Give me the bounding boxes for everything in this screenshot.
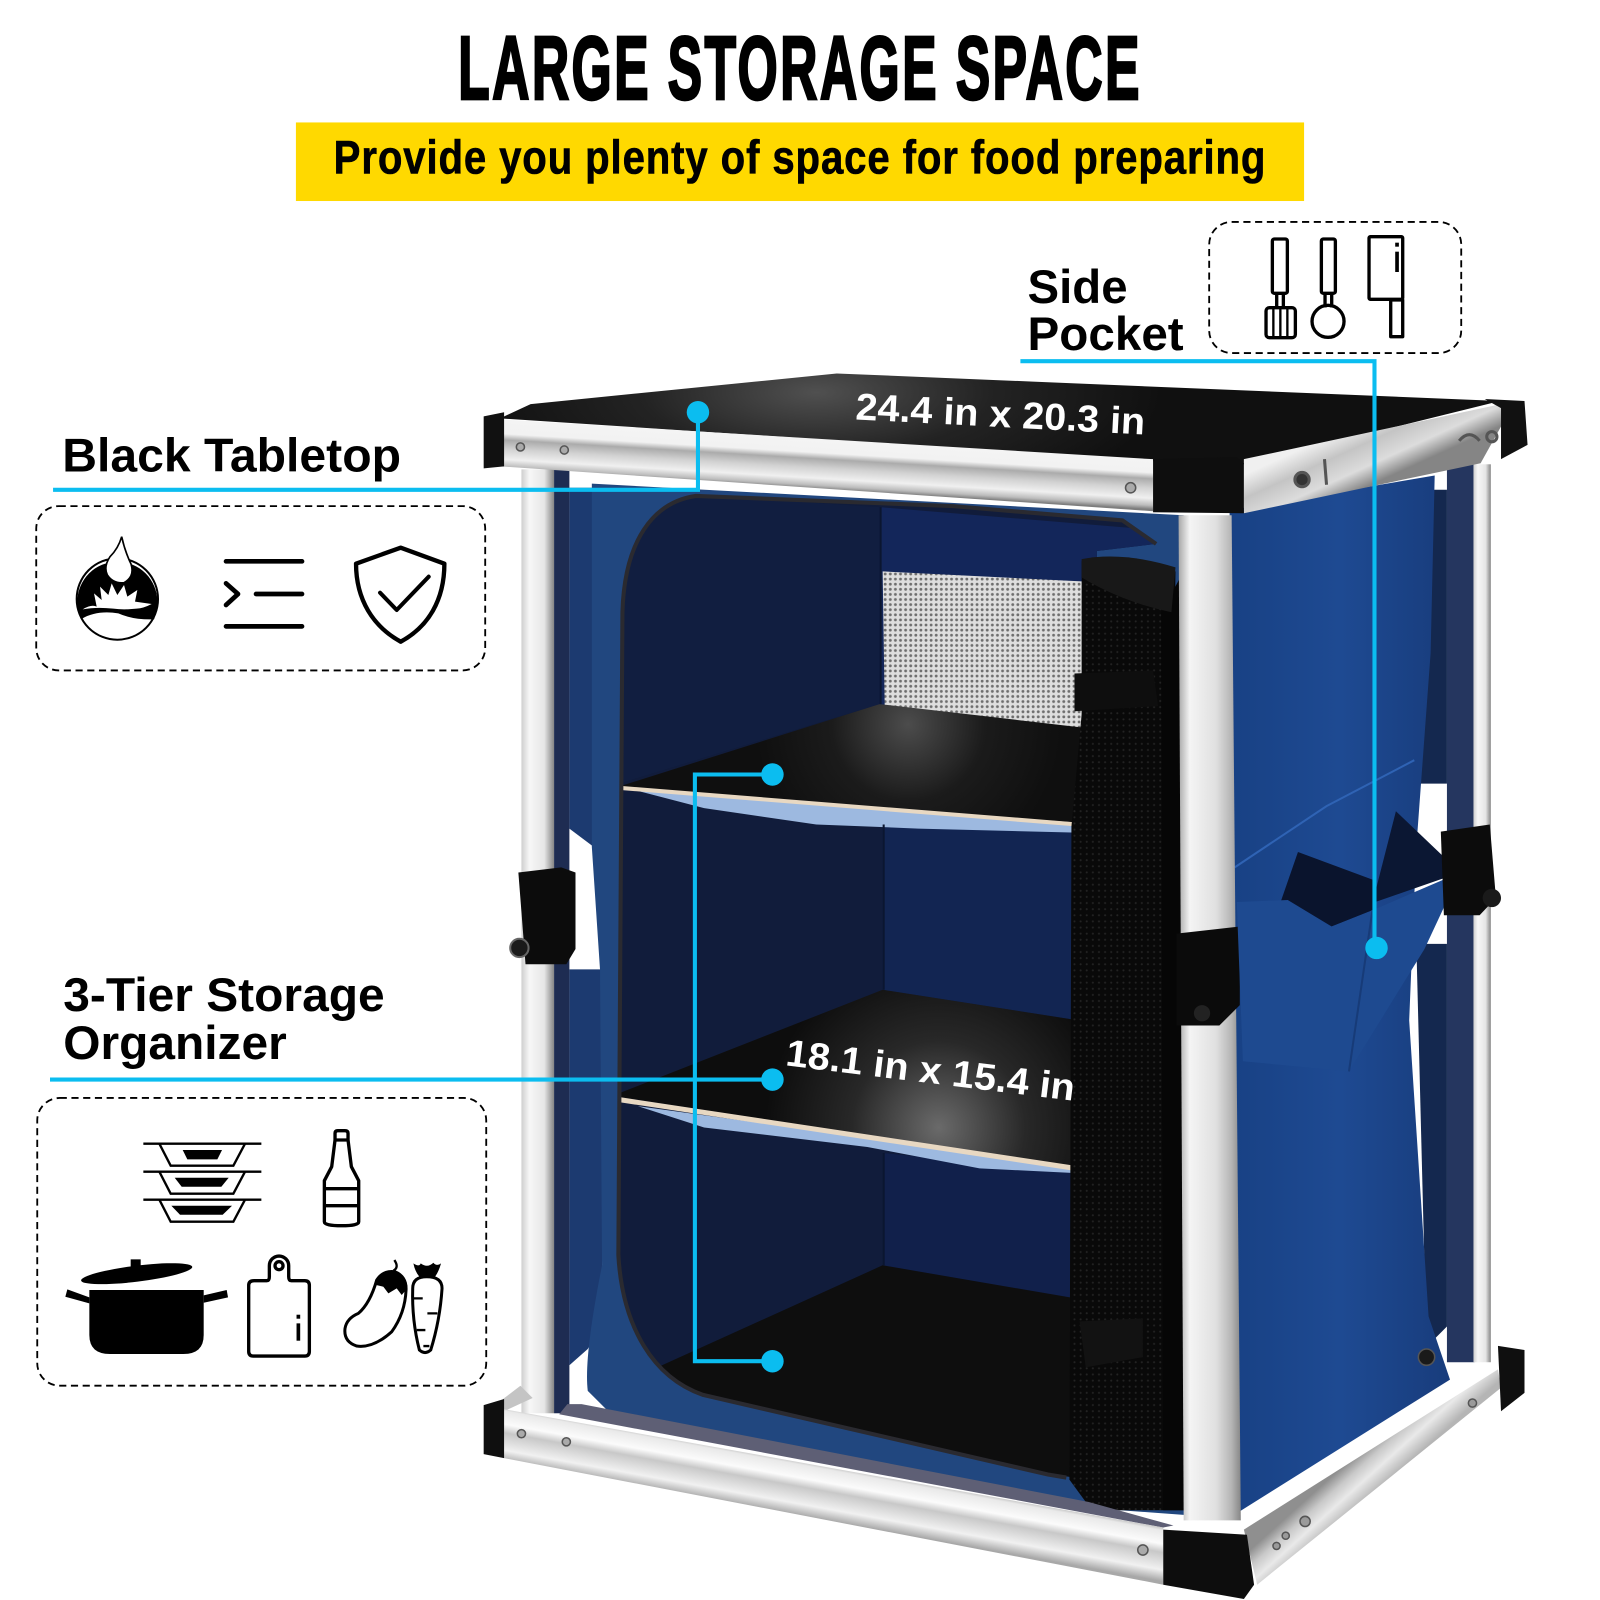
bottom frame fabric edge: [559, 1404, 1173, 1528]
icon: stacked plates: [143, 1144, 261, 1222]
top shelf: [618, 704, 1092, 824]
label: side pocket: Side: [1028, 261, 1128, 313]
label: black tabletop: Black Tabletop: [62, 429, 401, 481]
subtitle text: Provide you plenty of space for food preparing: [334, 131, 1266, 183]
icon: shield with check: [356, 548, 444, 642]
icon: cutting board: [249, 1256, 309, 1356]
bottom left corner: [484, 1399, 504, 1458]
front fabric panel: [587, 484, 1189, 1515]
tabletop right corner: [1485, 399, 1528, 459]
tabletop left corner: [484, 412, 504, 468]
icon: flat smooth surface: [226, 561, 302, 626]
icon: cooking pot: [65, 1259, 228, 1354]
tabletop front rail: [500, 419, 1153, 511]
yellow subtitle banner: [296, 122, 1304, 201]
bottom front corner: [1163, 1530, 1254, 1599]
callout: black tabletop leader: [53, 401, 709, 490]
cabinet interior: [612, 490, 1163, 1490]
label: 3-tier storage organizer: Organizer: [63, 1017, 287, 1069]
icon: carrot: [413, 1263, 442, 1353]
bottom front rail: [504, 1409, 1163, 1585]
fabric seam: [1235, 760, 1414, 867]
right side fabric panel: [1230, 476, 1450, 1513]
tabletop front corner: [1153, 457, 1244, 513]
label: side pocket: Pocket: [1028, 308, 1184, 360]
back right leg: [1447, 464, 1491, 1362]
top shelf edge: [618, 786, 1078, 833]
dimension: tabletop size: 24.4 in x 20.3 in: [855, 385, 1146, 443]
middle shelf: [612, 990, 1092, 1169]
bottom side rail: [1244, 1369, 1501, 1585]
panel: tabletop features: [36, 506, 485, 670]
icon: spatula: [1266, 239, 1295, 338]
top tier back wall: [880, 507, 1152, 704]
product photo: folding camp kitchen cabinet: [484, 373, 1528, 1599]
icon: bottle: [324, 1131, 359, 1226]
panel: utensils: [1209, 222, 1461, 353]
bottom rail rivets: [517, 1430, 1148, 1555]
corner seams: [881, 507, 884, 1265]
label: 3-tier storage organizer: [63, 969, 385, 1069]
bottom side rail hardware: [1273, 1349, 1477, 1549]
tabletop side rail: [1244, 404, 1501, 513]
side pockets: [1237, 811, 1460, 1071]
label: side pocket: [1028, 261, 1184, 360]
icon: water resistant drop: [77, 537, 158, 640]
top rail rivets: [516, 443, 1136, 493]
callout: 3-tier leader: [50, 763, 784, 1372]
callout: side pocket leader: [1020, 361, 1388, 959]
lower tier back wall: [884, 1154, 1070, 1298]
right hinge clamp: [1177, 927, 1240, 1026]
icon: ladle: [1312, 239, 1344, 337]
bottom shelf: [662, 1265, 1070, 1477]
icon: eggplant: [345, 1260, 407, 1346]
side rail latches: [1295, 432, 1497, 487]
label: 3-tier storage organizer: 3-Tier Storage: [63, 969, 385, 1021]
black tabletop: [500, 373, 1500, 465]
dimension: shelf size: 18.1 in x 15.4 in: [784, 1032, 1077, 1109]
front right leg: [1179, 515, 1241, 1520]
top tier left wall: [612, 490, 880, 786]
front left leg: [521, 469, 569, 1413]
middle tier back wall: [884, 827, 1072, 1019]
icon: cleaver: [1369, 237, 1403, 337]
left hinge clamp: [510, 867, 576, 964]
back left fabric strip: [569, 488, 602, 1365]
right back hinge clamp: [1441, 824, 1501, 915]
bottom right corner: [1498, 1346, 1524, 1411]
panel: kitchen items: [37, 1098, 486, 1386]
zipper edge: [618, 496, 1156, 1478]
ventilation mesh: [883, 571, 1087, 729]
back right fabric strip: [1416, 490, 1447, 1347]
middle shelf edge: [618, 1097, 1086, 1173]
rolled door black mesh sleeve: [1069, 556, 1189, 1510]
bottom left side rail stub: [503, 1386, 533, 1411]
